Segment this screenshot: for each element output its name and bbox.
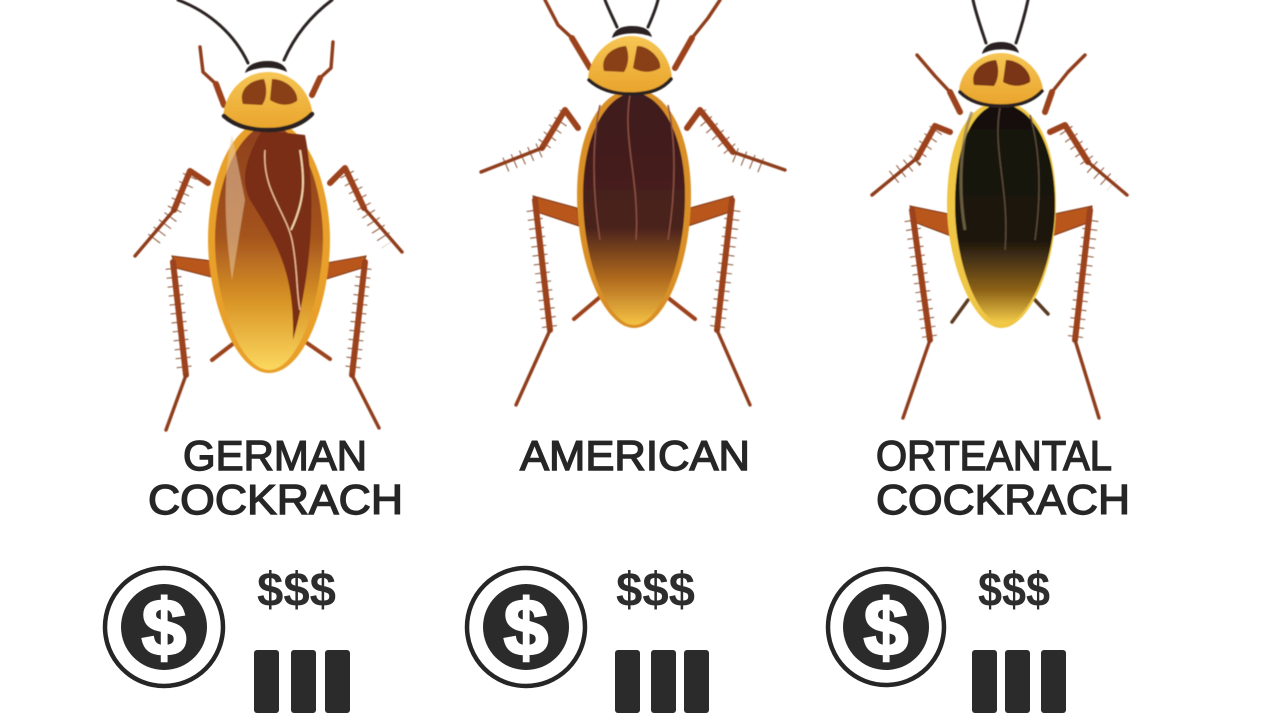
severity bars: German: [254, 650, 350, 713]
severity bars: American: [615, 650, 709, 713]
cost rating: American: $$$: [616, 564, 695, 617]
label: American: AMERICAN: [520, 432, 750, 479]
label: German cockroach: GERMAN: [183, 432, 367, 479]
icon: dollar coin, American: [467, 568, 585, 686]
icon: dollar coin, German: [105, 568, 223, 686]
severity bars: Oriental: [972, 650, 1066, 713]
label: German cockroach: COCKRACH: [148, 476, 403, 523]
label: Oriental cockroach: ORTEANTAL: [876, 432, 1112, 479]
icon: dollar coin, German: $: [142, 583, 186, 672]
illustration: Oriental cockroach: [872, 0, 1127, 418]
icon: dollar coin, American: $: [504, 583, 548, 672]
illustration: American cockroach: [481, 0, 785, 405]
illustration: German cockroach: [135, 0, 402, 430]
icon: dollar coin, Oriental: [828, 569, 944, 685]
label: Oriental cockroach: [876, 432, 1130, 523]
cost rating: Oriental: $$$: [978, 564, 1050, 617]
cost rating: German: $$$: [257, 564, 336, 617]
label: Oriental cockroach: COCKRACH: [876, 476, 1130, 523]
icon: dollar coin, Oriental: $: [864, 583, 908, 672]
label: German cockroach: [148, 432, 403, 523]
